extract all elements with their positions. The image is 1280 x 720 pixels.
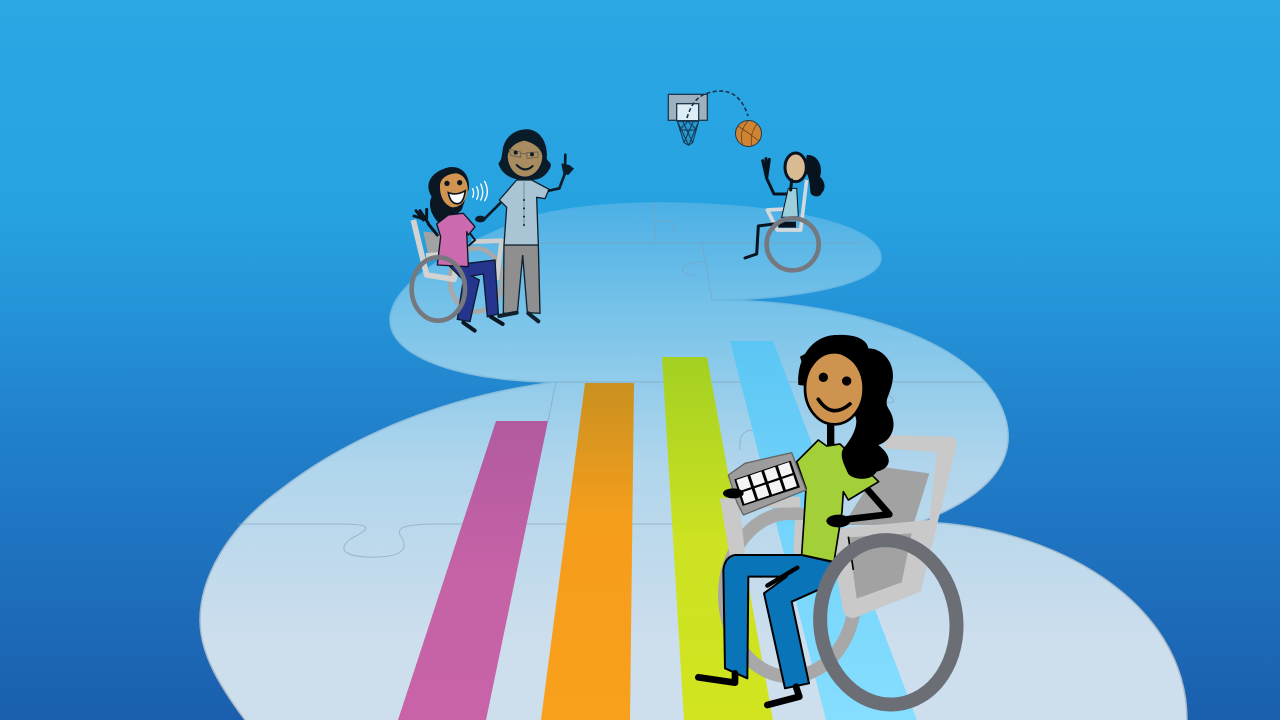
glasses xyxy=(509,149,538,158)
chair frame xyxy=(828,435,957,618)
hair xyxy=(498,129,551,180)
arm behind shirt xyxy=(847,487,889,519)
feet xyxy=(698,673,799,705)
face xyxy=(440,173,468,207)
hair xyxy=(428,167,469,227)
hair xyxy=(798,335,894,479)
eyes and smile xyxy=(818,373,851,411)
tablet xyxy=(723,453,806,515)
winding puzzle path xyxy=(200,203,1187,720)
head xyxy=(785,153,806,182)
waving arm xyxy=(414,209,437,235)
neck xyxy=(820,422,842,445)
stripe: orange xyxy=(541,383,634,720)
sound waves xyxy=(473,181,487,201)
front wheel xyxy=(812,533,965,711)
person: wheelchair basketball player xyxy=(745,153,825,270)
feet xyxy=(463,317,503,331)
person: large wheelchair user with communication tablet xyxy=(698,335,965,711)
pants xyxy=(450,260,498,322)
limbs xyxy=(745,159,792,258)
shirt xyxy=(797,440,879,562)
shirt xyxy=(499,180,549,245)
arms and hands xyxy=(485,155,565,218)
stripe: lime xyxy=(662,357,773,720)
person: woman in wheelchair speaking xyxy=(412,167,503,331)
face xyxy=(508,141,542,177)
basketball hoop xyxy=(668,94,707,145)
shirt xyxy=(437,213,475,267)
person: standing woman with glasses pointing up xyxy=(475,129,574,321)
face xyxy=(805,352,864,424)
wheel xyxy=(767,218,819,270)
ponytail xyxy=(805,155,825,196)
dashed ball trajectory xyxy=(687,91,748,118)
pants xyxy=(723,555,834,688)
stripe: light blue xyxy=(730,341,917,720)
stripe: magenta xyxy=(398,421,548,720)
jersey xyxy=(782,188,798,217)
hand xyxy=(826,515,850,527)
basketball xyxy=(736,120,762,146)
front wheel xyxy=(412,257,465,321)
